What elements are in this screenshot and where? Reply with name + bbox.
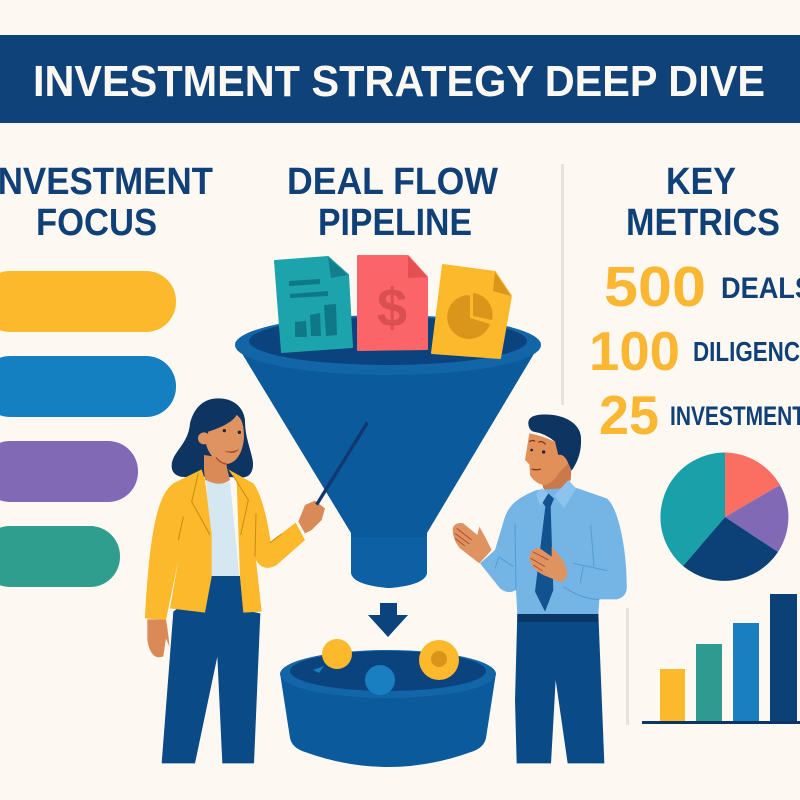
- heading: investment focus: FOCUS: [36, 202, 157, 244]
- heading: investment focus: [0, 161, 213, 244]
- documents: [275, 256, 511, 358]
- heading: deal flow pipeline: [287, 161, 498, 244]
- pill: green: [0, 526, 120, 587]
- document: dollar: [358, 256, 427, 350]
- heading: key metrics: KEY: [666, 161, 736, 203]
- shirt: [206, 480, 239, 576]
- pill: yellow: [0, 271, 176, 332]
- trousers: [515, 613, 604, 763]
- focus pills: [0, 271, 176, 587]
- face: [525, 433, 572, 485]
- right hand: [529, 547, 567, 583]
- pill: purple: [0, 441, 138, 502]
- metric: 100 diligence: [589, 320, 800, 382]
- pie chart: [660, 452, 788, 581]
- trousers: [162, 576, 260, 763]
- metric: 25 investments: 25: [599, 384, 659, 446]
- coins: [313, 639, 459, 695]
- collar: [536, 480, 576, 508]
- title: INVESTMENT STRATEGY DEEP DIVE: [33, 57, 765, 106]
- heading: key metrics: METRICS: [626, 202, 780, 244]
- heading: deal flow pipeline: PIPELINE: [318, 202, 472, 244]
- arrow down: [368, 603, 408, 637]
- funnel: [235, 315, 541, 588]
- hair: [528, 415, 581, 471]
- pill: blue: [0, 356, 176, 417]
- heading: key metrics: [626, 161, 780, 244]
- woman presenter: [145, 398, 367, 763]
- pointer: [317, 423, 367, 505]
- document: report: [275, 257, 352, 352]
- metric: 25 investments: [599, 384, 800, 446]
- left hand: [147, 619, 169, 657]
- tie: [535, 493, 554, 612]
- hair: [172, 398, 253, 477]
- man: [453, 415, 627, 763]
- heading: deal flow pipeline: DEAL FLOW: [287, 161, 498, 203]
- collection bowl: [280, 639, 496, 767]
- right hand: [298, 501, 325, 533]
- neck: [204, 455, 230, 484]
- jacket: [145, 469, 212, 620]
- shirt: [480, 487, 627, 614]
- metric: 500 deals: [604, 255, 800, 319]
- title banner: [0, 35, 800, 123]
- neck: [540, 458, 572, 497]
- document: dollar: $: [377, 278, 407, 338]
- bar chart: [642, 594, 800, 724]
- left hand: [453, 523, 492, 563]
- metric: 100 diligence: 100: [589, 320, 680, 382]
- document: pie chart: [432, 265, 511, 358]
- face: [206, 415, 244, 464]
- metric: 500 deals: 500: [604, 255, 706, 319]
